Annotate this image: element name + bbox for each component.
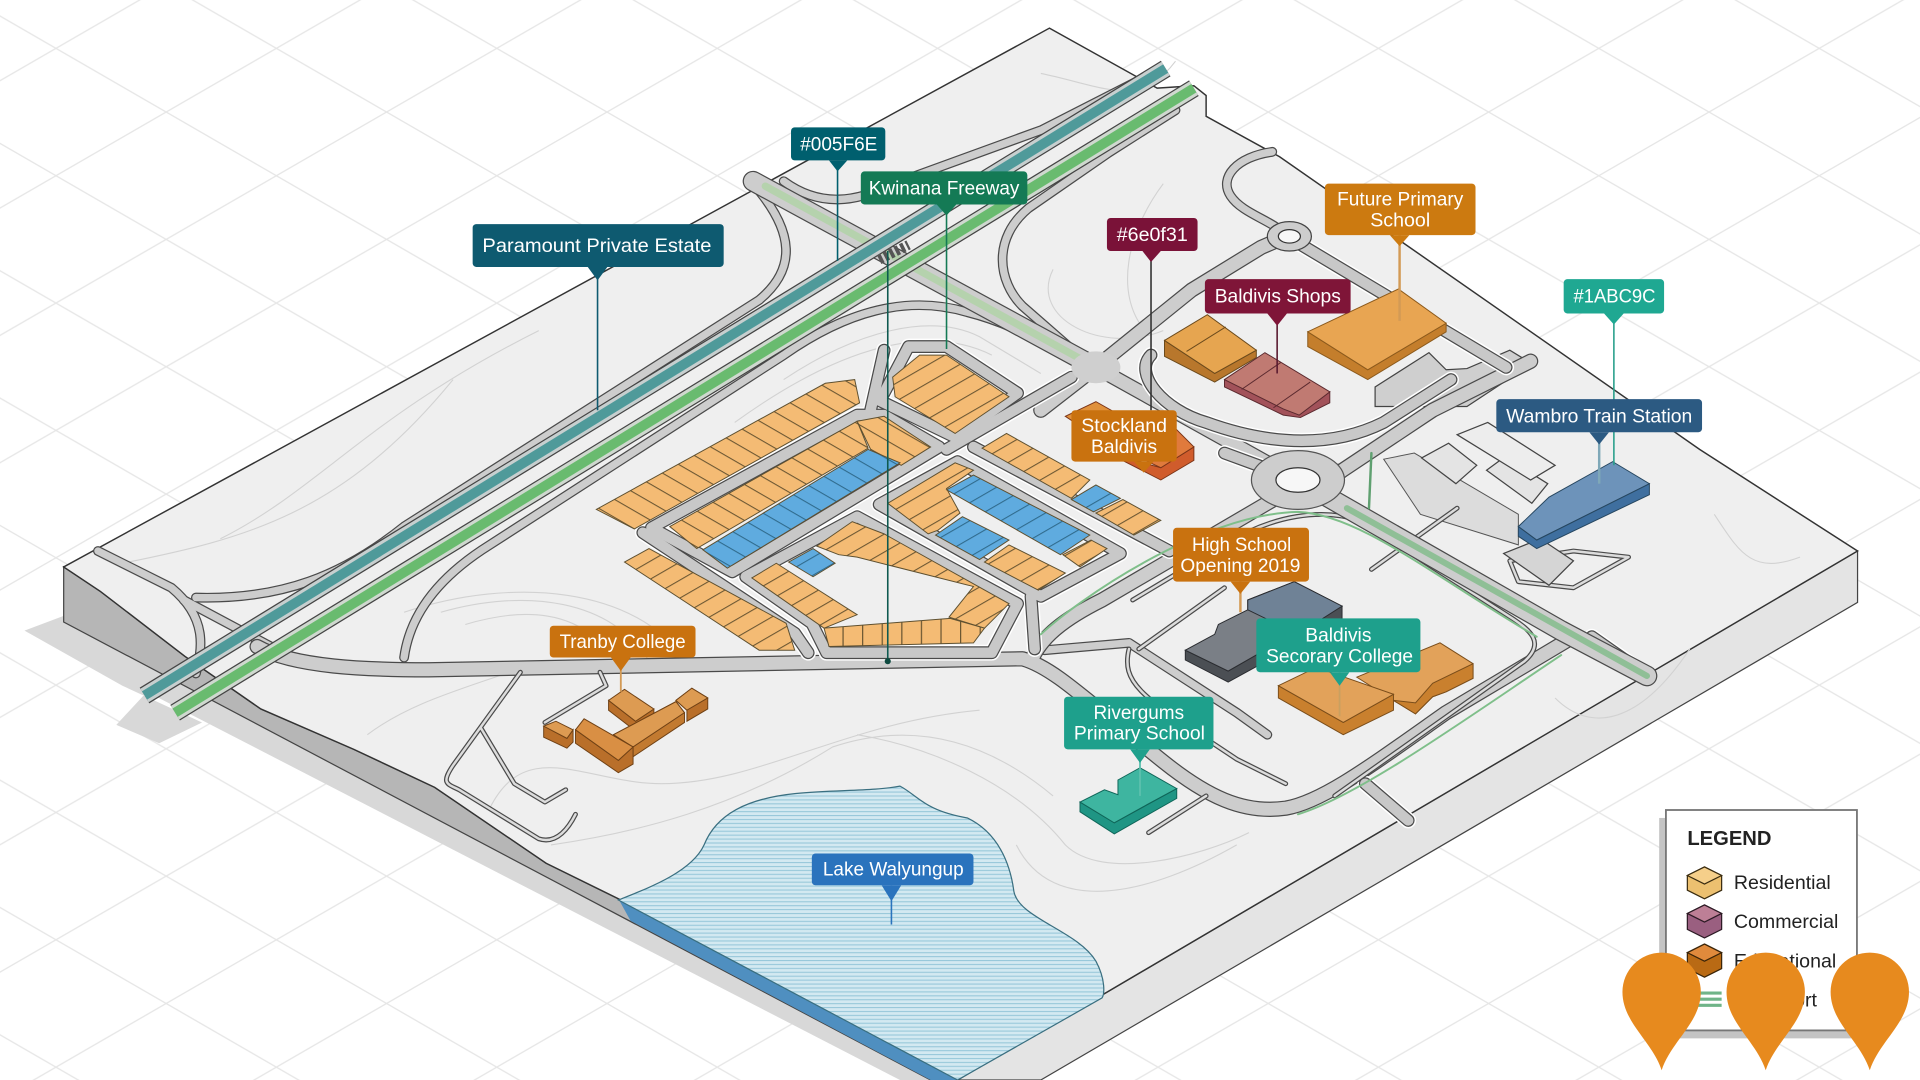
label: #6e0f31	[1107, 218, 1198, 410]
legend panel	[1659, 810, 1857, 1038]
roundabout north	[1267, 222, 1311, 251]
main junction	[1071, 351, 1120, 383]
legend title: LEGEND	[1687, 828, 1771, 850]
label: Rivergums Primary School: Primary School	[1074, 723, 1205, 745]
label: Baldivis Secorary College	[1256, 618, 1420, 716]
label: Stockland Baldivis: Baldivis	[1091, 436, 1157, 458]
legend shadow	[1659, 818, 1851, 1038]
building: Future Primary School	[1308, 289, 1446, 380]
label: Future Primary School: Future Primary	[1337, 189, 1463, 211]
label: High School Opening 2019	[1173, 528, 1309, 612]
legend icon: transport	[1687, 993, 1722, 1005]
roundabout east	[1251, 451, 1344, 509]
right side face	[958, 551, 1858, 1080]
legend icon: residential	[1687, 867, 1722, 899]
label: Rivergums Primary School	[1064, 697, 1213, 796]
left side face	[64, 567, 958, 1080]
label: Kwinana Freeway: Kwinana Freeway	[869, 178, 1020, 200]
label: Baldivis Shops: Baldivis Shops	[1215, 285, 1341, 307]
building: Baldivis Secondary College	[1278, 643, 1473, 735]
legend box	[1666, 810, 1857, 1030]
lake water	[618, 786, 1104, 1080]
legend text: educational: Educational	[1734, 950, 1836, 972]
map pin 3	[1831, 953, 1909, 1070]
legend icon: commercial	[1687, 905, 1722, 938]
label: High School Opening 2019: High School	[1192, 534, 1291, 556]
cross road with median, north-west	[753, 181, 1096, 367]
map pin 1	[1622, 953, 1701, 1070]
leader line: central estate pointer	[885, 251, 891, 664]
legend text: residential: Residential	[1734, 872, 1831, 894]
shopping centre parking apron	[1375, 350, 1532, 407]
contour lines	[122, 61, 1800, 891]
label: High School Opening 2019: Opening 2019	[1180, 555, 1300, 577]
legend text: commercial: Commercial	[1734, 911, 1838, 933]
label: Baldivis Secorary College: Baldivis	[1305, 625, 1372, 647]
road network	[98, 71, 1647, 840]
label: Baldivis Secorary College: Secorary College	[1266, 645, 1413, 667]
label: Future Primary School: School	[1370, 210, 1430, 232]
Kwinana Freeway carriageways	[144, 69, 1194, 713]
label: #005F6E: #005F6E	[800, 134, 877, 156]
building: Rivergums Primary School	[1080, 768, 1177, 834]
residential estate lots	[596, 355, 1161, 650]
legend icon: educational	[1687, 944, 1722, 977]
label: #005F6E	[791, 127, 885, 261]
label: Stockland Baldivis	[1071, 410, 1177, 473]
building: Stockland Baldivis	[1065, 402, 1194, 480]
Lake Walyungup	[618, 786, 1104, 1080]
lake side strip	[618, 899, 958, 1080]
label: Rivergums Primary School: Rivergums	[1093, 702, 1184, 724]
station forecourt	[1384, 453, 1518, 545]
building: residential shops	[1164, 315, 1256, 382]
label: #1ABC9C	[1564, 279, 1664, 465]
label: Future Primary School	[1325, 184, 1476, 321]
label: Wambro Train Station	[1496, 399, 1702, 484]
label: #6e0f31: #6e0f31	[1117, 224, 1188, 246]
label: Lake Walyungup: Lake Walyungup	[823, 859, 964, 881]
map pin 2	[1727, 953, 1805, 1070]
label: Kwinana Freeway	[861, 171, 1027, 349]
label: #1ABC9C: #1ABC9C	[1573, 285, 1656, 307]
label: Paramount Private Estate	[473, 224, 724, 410]
block ground shadow	[24, 616, 931, 1080]
label: Baldivis Shops	[1205, 279, 1351, 373]
station platforms	[1422, 422, 1573, 585]
green verge lines	[1041, 512, 1537, 637]
label: Wambro Train Station: Wambro Train Station	[1506, 405, 1692, 427]
label: Paramount Private Estate: Paramount Private Estate	[482, 235, 712, 257]
building: Tranby College	[544, 688, 708, 773]
label: Lake Walyungup	[812, 853, 973, 924]
cross road with median, south-east	[1298, 480, 1647, 676]
building: Baldivis Shops commercial	[1224, 353, 1330, 418]
building: Wambro Train Station	[1518, 462, 1649, 549]
label: Tranby College	[550, 626, 696, 692]
building: High School	[1185, 582, 1342, 682]
label: Stockland Baldivis: Stockland	[1081, 415, 1167, 437]
legend text: transport: Transport	[1734, 990, 1817, 1012]
label: Tranby College: Tranby College	[560, 631, 686, 653]
